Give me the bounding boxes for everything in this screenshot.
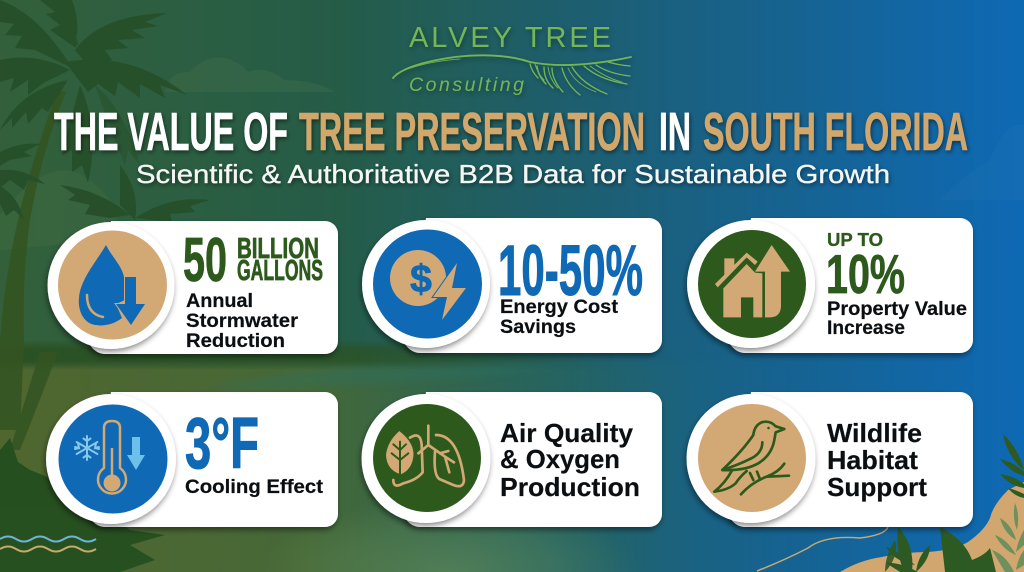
icon: water drop with arrow bbox=[48, 222, 174, 349]
stat: up to 10%: UP TO bbox=[827, 230, 883, 250]
icon: house with up arrow bbox=[687, 220, 815, 348]
palm trees bbox=[0, 0, 210, 572]
icon: leaf and lungs bbox=[362, 394, 490, 523]
card: property value bbox=[687, 218, 973, 353]
card: wildlife bbox=[686, 392, 973, 527]
label: annual stormwater reduction bbox=[186, 290, 298, 352]
logo: Alvey Tree Consulting bbox=[393, 22, 631, 96]
stat: 50 billion gallons: GALLONS bbox=[237, 255, 323, 287]
label: annual stormwater reduction: Annual bbox=[186, 290, 253, 312]
logo: Alvey Tree Consulting: ALVEY TREE bbox=[409, 22, 611, 54]
icon: dollar and lightning bolt: $ bbox=[410, 258, 432, 301]
label: annual stormwater reduction: Stormwater bbox=[186, 310, 298, 332]
subtitle: Scientific & Authoritative B2B Data for Sustainable Growth bbox=[136, 159, 890, 189]
label: air quality and oxygen production: & Oxygen bbox=[500, 444, 620, 474]
label: air quality and oxygen production: Production bbox=[500, 472, 640, 502]
label: annual stormwater reduction: Reduction bbox=[186, 330, 285, 352]
icon: bird on branch bbox=[686, 394, 816, 523]
label: cooling effect: Cooling Effect bbox=[185, 477, 324, 498]
label: energy cost savings: Savings bbox=[500, 316, 576, 338]
stat: 50 billion gallons: BILLION bbox=[237, 233, 319, 265]
label: wildlife habitat support bbox=[827, 418, 927, 502]
stat: 50 billion gallons bbox=[183, 226, 323, 295]
title bbox=[54, 102, 968, 162]
label: wildlife habitat support: Wildlife bbox=[827, 418, 922, 448]
label: air quality and oxygen production: Air Quality bbox=[500, 418, 634, 448]
label: wildlife habitat support: Habitat bbox=[827, 445, 918, 475]
card: stormwater bbox=[48, 221, 338, 354]
stat: up to 10% bbox=[826, 230, 905, 305]
label: energy cost savings bbox=[500, 296, 619, 338]
card: cooling bbox=[46, 392, 338, 527]
card: air quality bbox=[362, 392, 662, 527]
logo: Alvey Tree Consulting: Consulting bbox=[409, 74, 524, 96]
label: air quality and oxygen production bbox=[500, 418, 640, 502]
label: property value increase bbox=[827, 298, 967, 339]
label: wildlife habitat support: Support bbox=[827, 472, 927, 502]
icon: thermometer and snowflake bbox=[46, 394, 176, 524]
title: TREE PRESERVATION bbox=[299, 102, 645, 162]
label: property value increase: Increase bbox=[827, 317, 905, 339]
icon: dollar and lightning bolt bbox=[362, 220, 490, 348]
title: THE VALUE OF bbox=[54, 102, 288, 162]
label: energy cost savings: Energy Cost bbox=[500, 296, 619, 318]
stat: 50 billion gallons: 50 bbox=[183, 226, 227, 295]
stat: 10-50%: 10-50% bbox=[498, 232, 643, 311]
beach and foliage bottom right bbox=[757, 434, 1024, 572]
stat: up to 10%: 10% bbox=[826, 243, 905, 305]
waves decoration bbox=[0, 536, 96, 552]
stat: 3°F: 3°F bbox=[185, 404, 259, 484]
title: IN bbox=[659, 102, 691, 162]
label: property value increase: Property Value bbox=[827, 298, 967, 320]
card: energy bbox=[362, 218, 662, 353]
